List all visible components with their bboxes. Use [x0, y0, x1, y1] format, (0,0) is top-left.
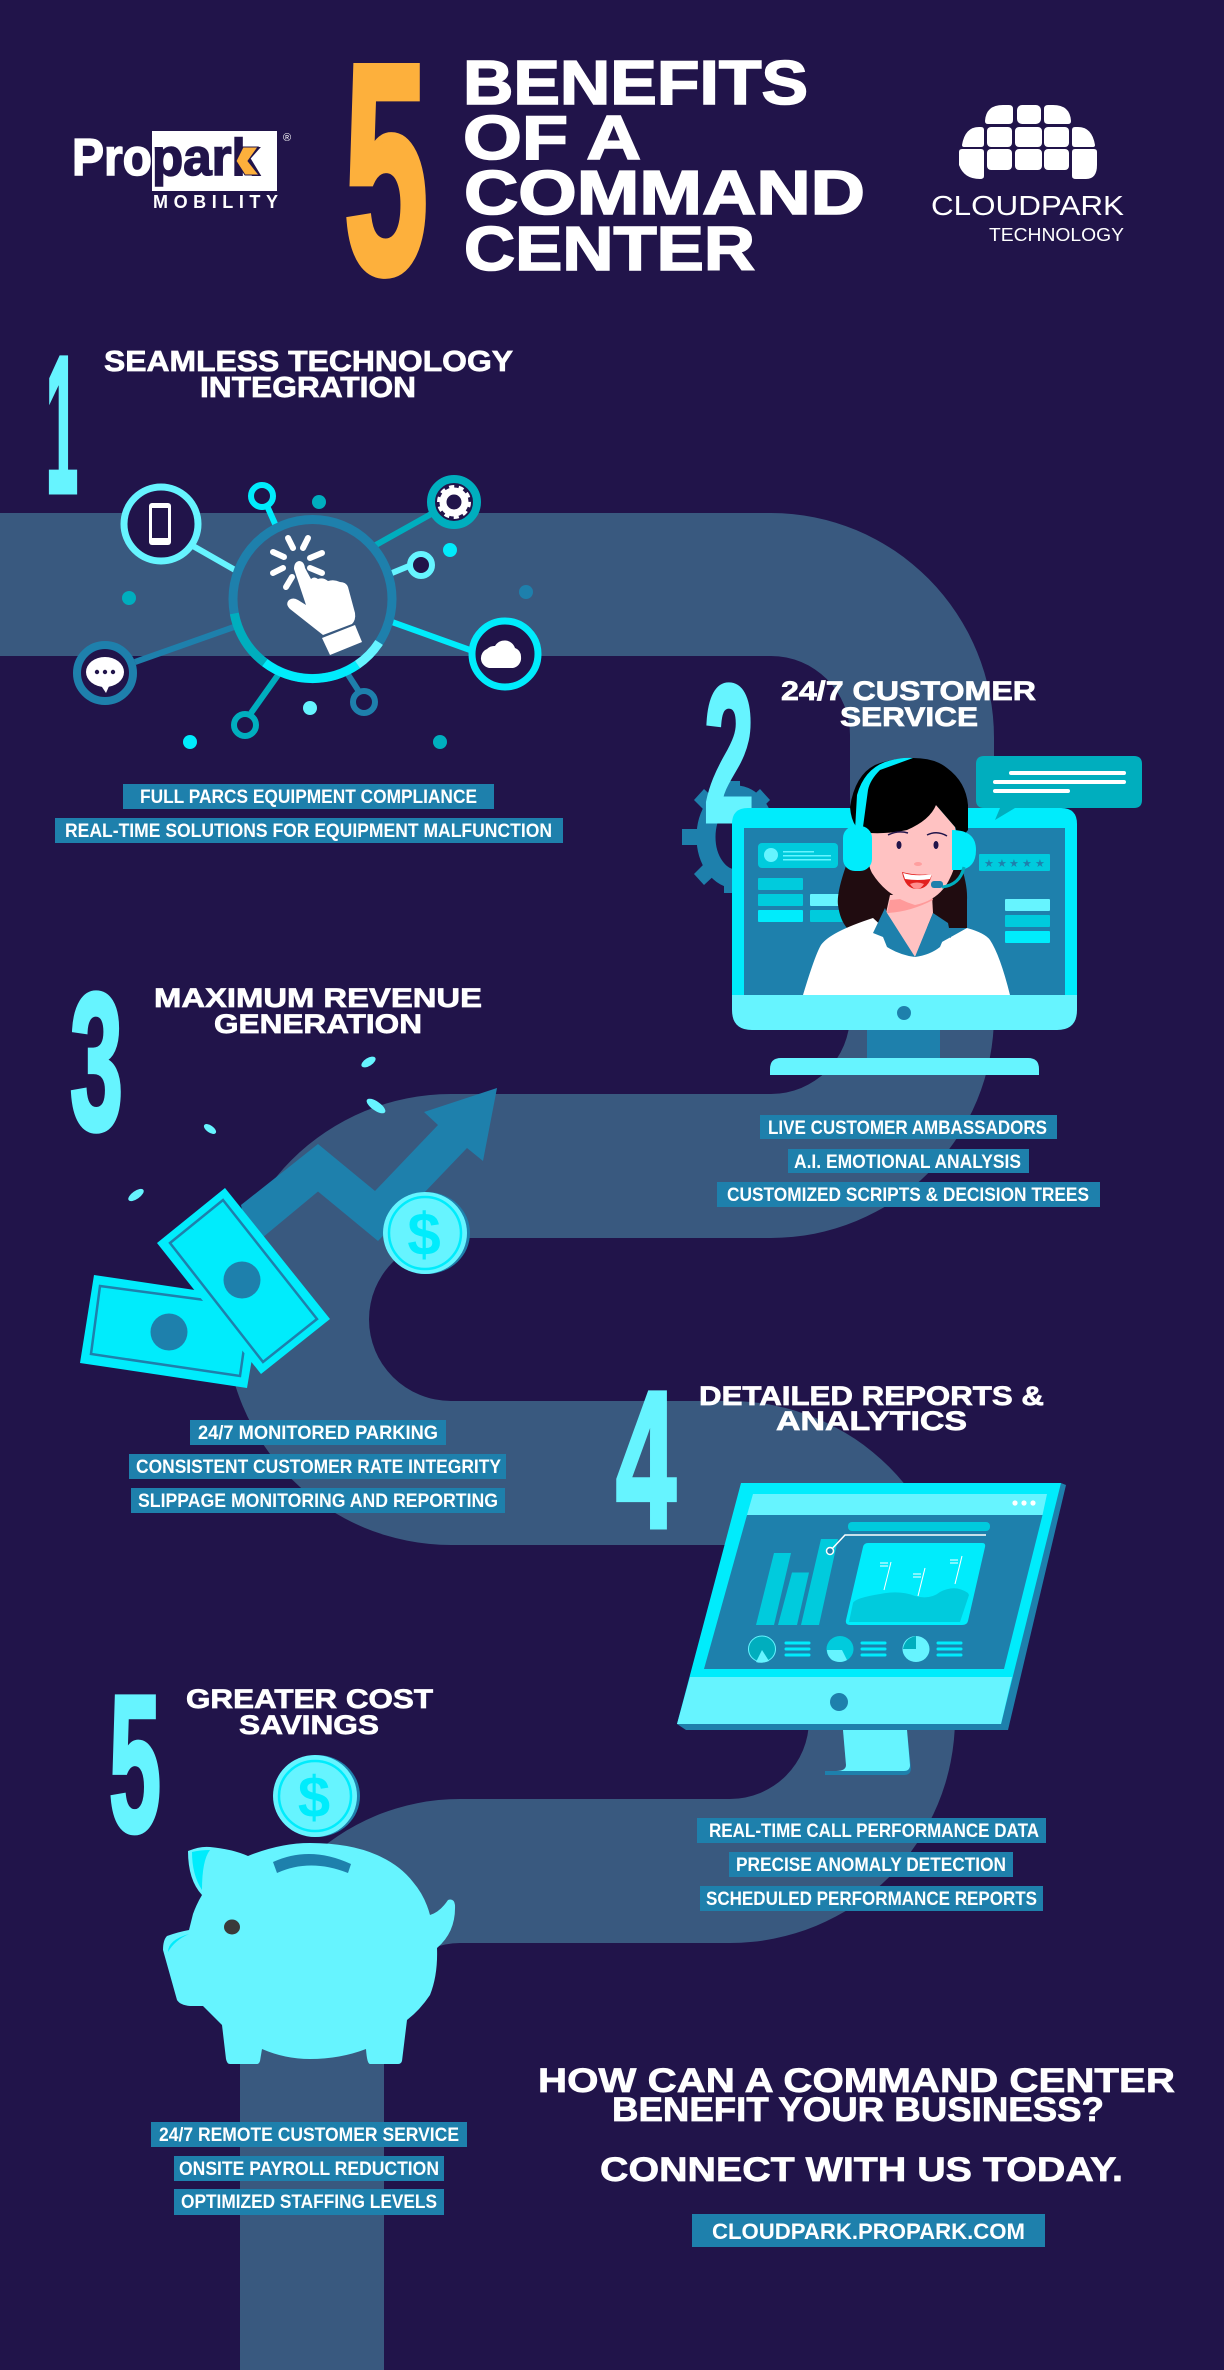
icon: floating coins flecks: [126, 1054, 388, 1203]
label: live customer ambassadors: LIVE CUSTOMER AMBASSADORS: [768, 1118, 1047, 1139]
icon: rising arrow: [241, 1088, 497, 1248]
heading: SEAMLESS TECHNOLOGY: [104, 346, 513, 378]
heading: DETAILED REPORTS &: [699, 1381, 1044, 1411]
heading: [186, 1684, 434, 1740]
heading: [154, 983, 482, 1039]
heading: ANALYTICS: [776, 1406, 967, 1436]
title: [463, 49, 865, 284]
question heading: [538, 2062, 1175, 2129]
icon: monitor with customer agent: ★: [984, 858, 994, 870]
connect line: CONNECT WITH US TODAY.: [600, 2151, 1123, 2189]
label: anomaly detection: PRECISE ANOMALY DETECTION: [736, 1855, 1006, 1876]
title: CENTER: [464, 215, 755, 284]
panel: benefit 3: 3: [70, 953, 123, 1171]
icon: coin: [383, 1192, 470, 1274]
icon: analytics monitor: [677, 1483, 1066, 1775]
icon: coin: $: [407, 1201, 441, 1268]
icon: monitor with customer agent: ★: [1022, 858, 1032, 870]
label: real-time solutions: REAL-TIME SOLUTIONS FOR EQUIPMENT MALFUNCTION: [65, 821, 552, 842]
call to action: [538, 2062, 1175, 2247]
panel: benefit 5: 5: [109, 1655, 161, 1873]
logo: Propark Mobility: Pro: [72, 129, 152, 187]
heading: 24/7 CUSTOMER: [781, 676, 1036, 706]
heading: SAVINGS: [239, 1710, 379, 1740]
label: AI emotional analysis: A.I. EMOTIONAL ANALYSIS: [794, 1152, 1021, 1173]
logo: Propark Mobility: MOBILITY: [153, 192, 278, 212]
icon: monitor with customer agent: ★: [1035, 858, 1045, 870]
title: OF A: [463, 104, 641, 173]
icon: monitor with customer agent: ★: [1009, 858, 1019, 870]
panel: benefit 3: [70, 953, 506, 1513]
logo: Propark Mobility: [72, 129, 291, 212]
logo: Propark Mobility: park: [152, 129, 260, 187]
label: remote customer service: 24/7 REMOTE CUSTOMER SERVICE: [159, 2125, 459, 2146]
icon: banknotes: [80, 1188, 330, 1388]
panel: benefit 5: [109, 1655, 467, 2215]
icon: gear: [682, 781, 770, 893]
panel: benefit 4: [616, 1351, 1066, 1911]
label: slippage monitoring: SLIPPAGE MONITORING AND REPORTING: [138, 1491, 498, 1512]
icon: coin above piggy bank: $: [298, 1765, 330, 1830]
heading: [104, 346, 513, 404]
panel: benefit 1: 1: [46, 316, 78, 534]
icon: coin above piggy bank: [273, 1755, 360, 1837]
panel: benefit 2: [682, 645, 1142, 1207]
logo: Propark Mobility: ®: [283, 132, 291, 144]
label: payroll reduction: ONSITE PAYROLL REDUCTION: [179, 2159, 439, 2180]
label: scheduled reports: SCHEDULED PERFORMANCE REPORTS: [706, 1889, 1037, 1910]
title: BENEFITS: [463, 49, 808, 118]
heading: [699, 1381, 1044, 1436]
label: full PARCS: FULL PARCS EQUIPMENT COMPLIANCE: [140, 787, 477, 808]
question heading: HOW CAN A COMMAND CENTER: [538, 2062, 1175, 2100]
website button: [692, 2214, 1045, 2247]
panel: benefit 1: [46, 316, 563, 843]
icon: technology network: [77, 479, 538, 749]
heading: GREATER COST: [186, 1684, 434, 1714]
winding road background: [0, 513, 994, 2370]
icon: piggy bank: [163, 1843, 455, 2064]
label: monitored parking: 24/7 MONITORED PARKING: [198, 1423, 438, 1444]
icon: monitor with customer agent: [732, 756, 1142, 1075]
panel: benefit 2: 2: [704, 645, 754, 863]
title: COMMAND: [464, 159, 865, 228]
question heading: BENEFIT YOUR BUSINESS?: [612, 2091, 1104, 2129]
website button: CLOUDPARK.PROPARK.COM: [712, 2219, 1025, 2244]
logo: CloudPark Technology: CLOUDPARK: [931, 190, 1124, 221]
heading: SERVICE: [840, 702, 978, 732]
label: staffing levels: OPTIMIZED STAFFING LEVELS: [181, 2192, 437, 2213]
heading: [781, 676, 1036, 732]
label: customized scripts: CUSTOMIZED SCRIPTS & DECISION TREES: [727, 1185, 1089, 1206]
number 4: 4: [616, 1351, 676, 1569]
logo: CloudPark Technology: [931, 105, 1124, 245]
heading: MAXIMUM REVENUE: [154, 983, 482, 1013]
speech bubble: [976, 756, 1142, 820]
label: call performance: REAL-TIME CALL PERFORMANCE DATA: [709, 1821, 1039, 1842]
label: rate integrity: CONSISTENT CUSTOMER RATE INTEGRITY: [136, 1457, 501, 1478]
icon: monitor with customer agent: ★: [997, 858, 1007, 870]
heading: INTEGRATION: [200, 372, 416, 404]
heading: GENERATION: [214, 1009, 422, 1039]
logo: CloudPark Technology: TECHNOLOGY: [989, 225, 1124, 245]
big orange number 5: 5: [344, 3, 428, 336]
